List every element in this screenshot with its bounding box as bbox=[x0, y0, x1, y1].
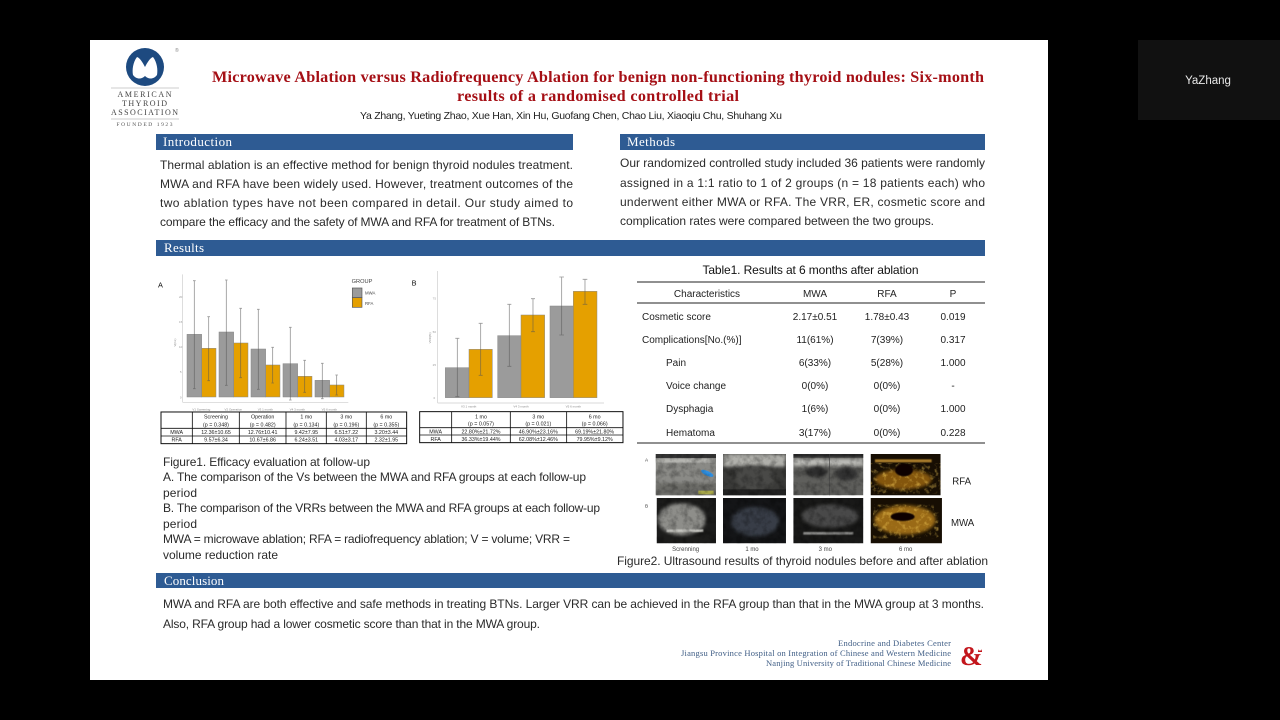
text block: methods: assigned in a 1:1 ratio to 1 of 2 groups (n = 18 patients each) who bbox=[620, 176, 985, 190]
heading: results bbox=[156, 240, 985, 256]
affiliations: Jiangsu Province Hospital on Integration of Chinese and Western Medicine bbox=[681, 648, 951, 658]
table: chart A values: Operation bbox=[251, 415, 274, 421]
table 1: results at 6 months: 11(61%) bbox=[796, 335, 834, 346]
table: chart A values: Screening bbox=[204, 415, 228, 421]
table: chart A values: (p = 0.348) bbox=[203, 422, 229, 428]
table 1: results at 6 months: 1(6%) bbox=[802, 404, 828, 415]
table 1: results at 6 months: 1.000 bbox=[940, 358, 966, 369]
chart B: volume reduction rates: B bbox=[412, 279, 417, 288]
text block: introduction: Thermal ablation is an effective method for benign thyroid nodules treatment. bbox=[160, 158, 573, 172]
table 1: results at 6 months: 0.228 bbox=[940, 428, 966, 439]
heading: methods: Methods bbox=[627, 134, 675, 149]
table: chart A values bbox=[161, 412, 407, 444]
presenter name tile: YaZhang bbox=[1185, 75, 1231, 87]
text block: figure 1 caption: period bbox=[163, 486, 197, 500]
table: chart A values: 2.32±1.95 bbox=[374, 438, 398, 444]
title: results of a randomised controlled trial bbox=[457, 87, 740, 105]
table 1: results at 6 months: RFA bbox=[877, 289, 897, 300]
chart B: volume reduction rates: 0 bbox=[433, 396, 435, 400]
chart A: volumes by group: 5 bbox=[180, 370, 182, 374]
chart A: volumes by group bbox=[158, 274, 376, 411]
table: chart A values: (p = 0.134) bbox=[293, 422, 319, 428]
table 1: results at 6 months: - bbox=[951, 381, 955, 392]
heading: introduction bbox=[156, 134, 573, 150]
panel: introduction bbox=[156, 134, 573, 229]
title: Microwave Ablation versus Radiofrequency Ablation for benign non-functioning thyroid nodules: Six-month bbox=[212, 68, 984, 86]
table: chart A values: (p = 0.196) bbox=[333, 422, 359, 428]
table: chart A values: 6.24±3.51 bbox=[294, 438, 318, 444]
table: chart B values: 1 mo bbox=[475, 414, 487, 420]
table: chart B values: (p = 0.021) bbox=[525, 422, 552, 428]
figure 2: ultrasound image grid: 1 mo bbox=[745, 547, 759, 553]
table: chart B values bbox=[420, 412, 623, 443]
legend: group: MWA bbox=[365, 291, 376, 296]
table 1: results at 6 months: Dysphagia bbox=[666, 404, 714, 415]
table 1: results at 6 months: 0(0%) bbox=[802, 381, 828, 392]
chart B: volume reduction rates: VRR(%) bbox=[428, 332, 432, 343]
table 1: results at 6 months: Pain bbox=[666, 358, 686, 369]
table: chart B values: (p = 0.066) bbox=[582, 422, 608, 428]
table: chart B values: 46.90%±23.16% bbox=[519, 429, 558, 435]
text block: methods: complication rates were compared between the two groups. bbox=[620, 214, 934, 228]
table 1: results at 6 months: 5(28%) bbox=[871, 358, 903, 369]
table 1: results at 6 months: 6(33%) bbox=[799, 358, 831, 369]
table: chart B values: 69.19%±21.80% bbox=[575, 429, 614, 435]
heading: results: Results bbox=[164, 240, 204, 255]
table: chart B values: MWA bbox=[429, 429, 443, 435]
table 1 title: Table1. Results at 6 months after ablation bbox=[702, 263, 918, 277]
table 1: results at 6 months: 0(0%) bbox=[874, 428, 900, 439]
ultrasound: RFA 6 months contrast bbox=[871, 454, 941, 495]
heading: conclusion bbox=[156, 573, 985, 588]
text block: figure 1 caption bbox=[163, 455, 600, 562]
table: chart A values: 6.51±7.22 bbox=[334, 430, 358, 436]
table 1: results at 6 months: 7(39%) bbox=[871, 335, 903, 346]
table 1: results at 6 months: 0(0%) bbox=[874, 404, 900, 415]
table 1: results at 6 months: MWA bbox=[803, 289, 827, 300]
table: chart A values: 3 mo bbox=[340, 415, 352, 421]
text block: figure 1 caption: volume reduction rate bbox=[163, 548, 278, 562]
table 1: results at 6 months: 0.317 bbox=[940, 335, 966, 346]
logo: American Thyroid Association: ASSOCIATION bbox=[111, 108, 178, 117]
table: chart A values: 12.36±10.65 bbox=[201, 430, 231, 436]
figure 2: ultrasound image grid: 3 mo bbox=[819, 547, 833, 553]
logo: American Thyroid Association: AMERICAN bbox=[118, 90, 172, 99]
text block: figure 1 caption: B. The comparison of the VRRs between the MWA and RFA groups at each follow-up bbox=[163, 501, 600, 515]
ultrasound: MWA 6 months contrast bbox=[871, 498, 942, 543]
figure 2: ultrasound image grid: MWA bbox=[951, 518, 975, 529]
chart A: volumes by group: 20 bbox=[179, 295, 183, 299]
affiliations: Endocrine and Diabetes Center bbox=[838, 638, 951, 648]
text block: introduction bbox=[160, 158, 573, 229]
logo: American Thyroid Association bbox=[111, 47, 179, 128]
chart A: volumes by group: 15 bbox=[179, 320, 183, 324]
chart B: volume reduction rates: V4 3 month bbox=[513, 405, 529, 409]
table 1: results at 6 months bbox=[637, 263, 985, 443]
text block: introduction: compare the efficacy and the safety of MWA and RFA for treatment of BTNs. bbox=[160, 215, 555, 229]
ultrasound: RFA 1 month bbox=[723, 454, 786, 495]
text block: conclusion: Also, RFA group had a lower cosmetic score than that in the MWA group. bbox=[163, 617, 540, 631]
table 1: results at 6 months: 1.78±0.43 bbox=[865, 312, 910, 323]
text block: introduction: MWA and RFA have been widely used. However, treatment outcomes of the bbox=[160, 177, 573, 191]
logo: American Thyroid Association: THYROID bbox=[122, 99, 167, 108]
affiliations bbox=[681, 638, 951, 668]
chart B: volume reduction rates: 75 bbox=[433, 297, 436, 301]
text block: methods: underwent either MWA or RFA. The VRR, ER, cosmetic score and bbox=[620, 195, 985, 209]
text block: conclusion bbox=[163, 597, 984, 631]
heading: introduction: Introduction bbox=[163, 134, 232, 149]
table: chart B values: 3 mo bbox=[532, 414, 544, 420]
chart A: volumes by group: 10 bbox=[179, 345, 183, 349]
text block: figure 1 caption: period bbox=[163, 517, 197, 531]
table: chart A values: 6 mo bbox=[380, 415, 392, 421]
table: chart A values: 3.20±3.44 bbox=[374, 430, 398, 436]
table: chart B values: 36.33%±19.44% bbox=[461, 437, 501, 443]
chart B: volume reduction rates: 50 bbox=[433, 330, 436, 334]
heading: conclusion: Conclusion bbox=[164, 573, 224, 588]
chart B: volume reduction rates: V3 1 month bbox=[461, 405, 477, 409]
figure 2: ultrasound image grid: RFA bbox=[952, 476, 972, 487]
presenter name tile bbox=[1138, 40, 1280, 120]
ultrasound: MWA 1 month bbox=[723, 498, 786, 543]
legend: group bbox=[352, 279, 376, 307]
title bbox=[212, 68, 984, 105]
panel: methods bbox=[620, 134, 985, 228]
table: chart A values: 9.57±6.34 bbox=[204, 438, 228, 444]
table: chart B values: (p = 0.057) bbox=[468, 422, 494, 428]
ultrasound: MWA 3 months bbox=[793, 498, 863, 543]
table 1: results at 6 months: Characteristics bbox=[674, 289, 740, 300]
figure 2: ultrasound image grid bbox=[645, 454, 975, 553]
text block: figure 1 caption: MWA = microwave ablation; RFA = radiofrequency ablation; V = volume; VRR = bbox=[163, 532, 570, 546]
poster background bbox=[90, 40, 1048, 680]
table 1: results at 6 months: Cosmetic score bbox=[642, 312, 711, 323]
table 1: results at 6 months: 0(0%) bbox=[874, 381, 900, 392]
table 1: results at 6 months: 1.000 bbox=[940, 404, 966, 415]
table 1: results at 6 months: 2.17±0.51 bbox=[793, 312, 838, 323]
table: chart A values: 10.67±6.86 bbox=[249, 438, 276, 444]
affiliations: Nanjing University of Traditional Chinese Medicine bbox=[766, 658, 951, 668]
table: chart B values: 79.95%±9.12% bbox=[577, 437, 613, 443]
figure 2: ultrasound image grid: B bbox=[645, 503, 648, 508]
chart A: volumes by group: V3 1 month bbox=[258, 407, 273, 411]
table 1: results at 6 months: Voice change bbox=[666, 381, 726, 392]
table 1: results at 6 months: 3(17%) bbox=[799, 428, 831, 439]
heading: methods bbox=[620, 134, 985, 150]
chart A: volumes by group: 0 bbox=[180, 395, 182, 399]
figure 2 caption: Figure2. Ultrasound results of thyroid nodules before and after ablation bbox=[617, 554, 988, 568]
icon: university ampersand logo: & bbox=[960, 641, 982, 671]
table 1: results at 6 months: Hematoma bbox=[666, 428, 715, 439]
figure 2: ultrasound image grid: Screnning bbox=[672, 547, 699, 553]
figure 2: ultrasound image grid: A bbox=[645, 458, 649, 463]
table: chart A values: (p = 0.355) bbox=[373, 422, 399, 428]
table: chart A values: 1 mo bbox=[300, 415, 312, 421]
text block: introduction: two ablation types have not been compared in detail. Our study aimed to bbox=[160, 196, 573, 210]
ultrasound: RFA 3 months bbox=[793, 454, 863, 495]
chart A: volumes by group: V1 Screening bbox=[192, 407, 211, 411]
logo: American Thyroid Association: FOUNDED 1923 bbox=[116, 122, 173, 128]
chart A: volumes by group: A bbox=[158, 281, 163, 290]
table: chart B values: RFA bbox=[430, 437, 441, 443]
chart A: volumes by group: V2 Operation bbox=[225, 407, 242, 411]
table 1: results at 6 months: Complications[No.(%)] bbox=[642, 335, 742, 346]
text block: methods: Our randomized controlled study included 36 patients were randomly bbox=[620, 156, 985, 170]
chart A: volumes by group: V5 6 month bbox=[322, 407, 337, 411]
table 1: results at 6 months: P bbox=[950, 289, 957, 300]
table: chart A values: MWA bbox=[170, 430, 184, 436]
chart A: volumes by group: V(mL) bbox=[173, 339, 177, 347]
legend: group: RFA bbox=[365, 301, 374, 306]
table: chart B values: 22.80%±21.72% bbox=[461, 429, 501, 435]
logo: American Thyroid Association: ® bbox=[175, 47, 179, 54]
text block: methods bbox=[620, 156, 985, 228]
table 1: results at 6 months: 0.019 bbox=[940, 312, 966, 323]
chart B: volume reduction rates: 25 bbox=[433, 363, 436, 367]
table: chart A values: RFA bbox=[171, 438, 182, 444]
table: chart A values: 9.42±7.95 bbox=[294, 430, 318, 436]
ultrasound: MWA screening bbox=[657, 498, 716, 543]
figure 2: ultrasound image grid: 6 mo bbox=[899, 547, 913, 553]
table: chart B values: 6 mo bbox=[589, 414, 601, 420]
chart B: volume reduction rates: V5 6 month bbox=[566, 405, 581, 409]
legend: group: GROUP bbox=[352, 279, 373, 285]
text block: figure 1 caption: Figure1. Efficacy evaluation at follow-up bbox=[163, 455, 370, 469]
table: chart A values: 12.76±10.41 bbox=[248, 430, 277, 436]
text block: conclusion: MWA and RFA are both effective and safe methods in treating BTNs. Larger VRR can be achieved in the RFA group than that in the MWA group at 3 months. bbox=[163, 597, 984, 611]
text block: figure 1 caption: A. The comparison of the Vs between the MWA and RFA groups at each follow-up bbox=[163, 470, 586, 484]
table: chart A values: (p = 0.482) bbox=[250, 422, 276, 428]
chart A: volumes by group: V4 3 month bbox=[290, 407, 305, 411]
chart B: volume reduction rates bbox=[412, 271, 604, 409]
authors: Ya Zhang, Yueting Zhao, Xue Han, Xin Hu, Guofang Chen, Chao Liu, Xiaoqiu Chu, Shuhang Xu bbox=[360, 110, 782, 122]
ultrasound: RFA screening bbox=[656, 454, 716, 495]
table: chart A values: 4.03±3.17 bbox=[334, 438, 358, 444]
table: chart B values: 62.08%±12.46% bbox=[519, 437, 558, 443]
